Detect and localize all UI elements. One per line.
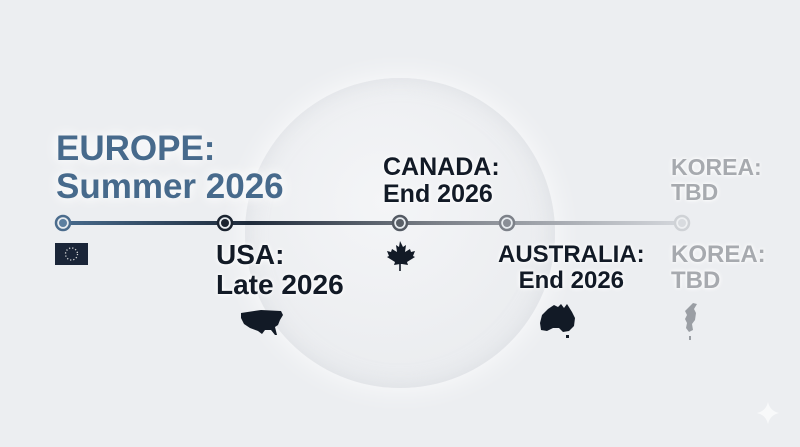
label: Korea bottom	[671, 241, 766, 294]
label: USA	[216, 239, 344, 300]
label: Australia: AUSTRALIA:	[498, 241, 645, 268]
icon: Australia map	[540, 304, 575, 338]
icon: sparkle	[757, 402, 779, 424]
icon: maple leaf	[387, 241, 415, 271]
label: Canada: CANADA:	[383, 153, 500, 181]
label: Korea bottom: KOREA:	[671, 241, 766, 268]
node: europe	[56, 216, 70, 230]
label: USA: USA:	[216, 239, 284, 270]
label: Australia: End 2026	[519, 267, 624, 294]
label: Canada	[383, 153, 500, 208]
icon: USA map	[241, 310, 283, 335]
label: Europe	[56, 129, 284, 206]
node: usa	[218, 216, 232, 230]
label: Korea top: TBD	[671, 179, 718, 205]
label: Europe: EUROPE:	[56, 129, 215, 168]
background circle	[245, 78, 555, 388]
icon: EU flag	[55, 243, 88, 265]
icon: Korea map	[685, 303, 697, 340]
label: Canada: End 2026	[383, 180, 493, 208]
node: korea	[675, 216, 689, 230]
label: Korea top	[671, 154, 762, 205]
node: canada	[393, 216, 407, 230]
label: Australia	[498, 241, 645, 294]
node: australia	[500, 216, 514, 230]
label: USA: Late 2026	[216, 269, 344, 300]
label: Europe: Summer 2026	[56, 167, 284, 206]
label: Korea top: KOREA:	[671, 154, 762, 180]
label: Korea bottom: TBD	[671, 267, 720, 294]
